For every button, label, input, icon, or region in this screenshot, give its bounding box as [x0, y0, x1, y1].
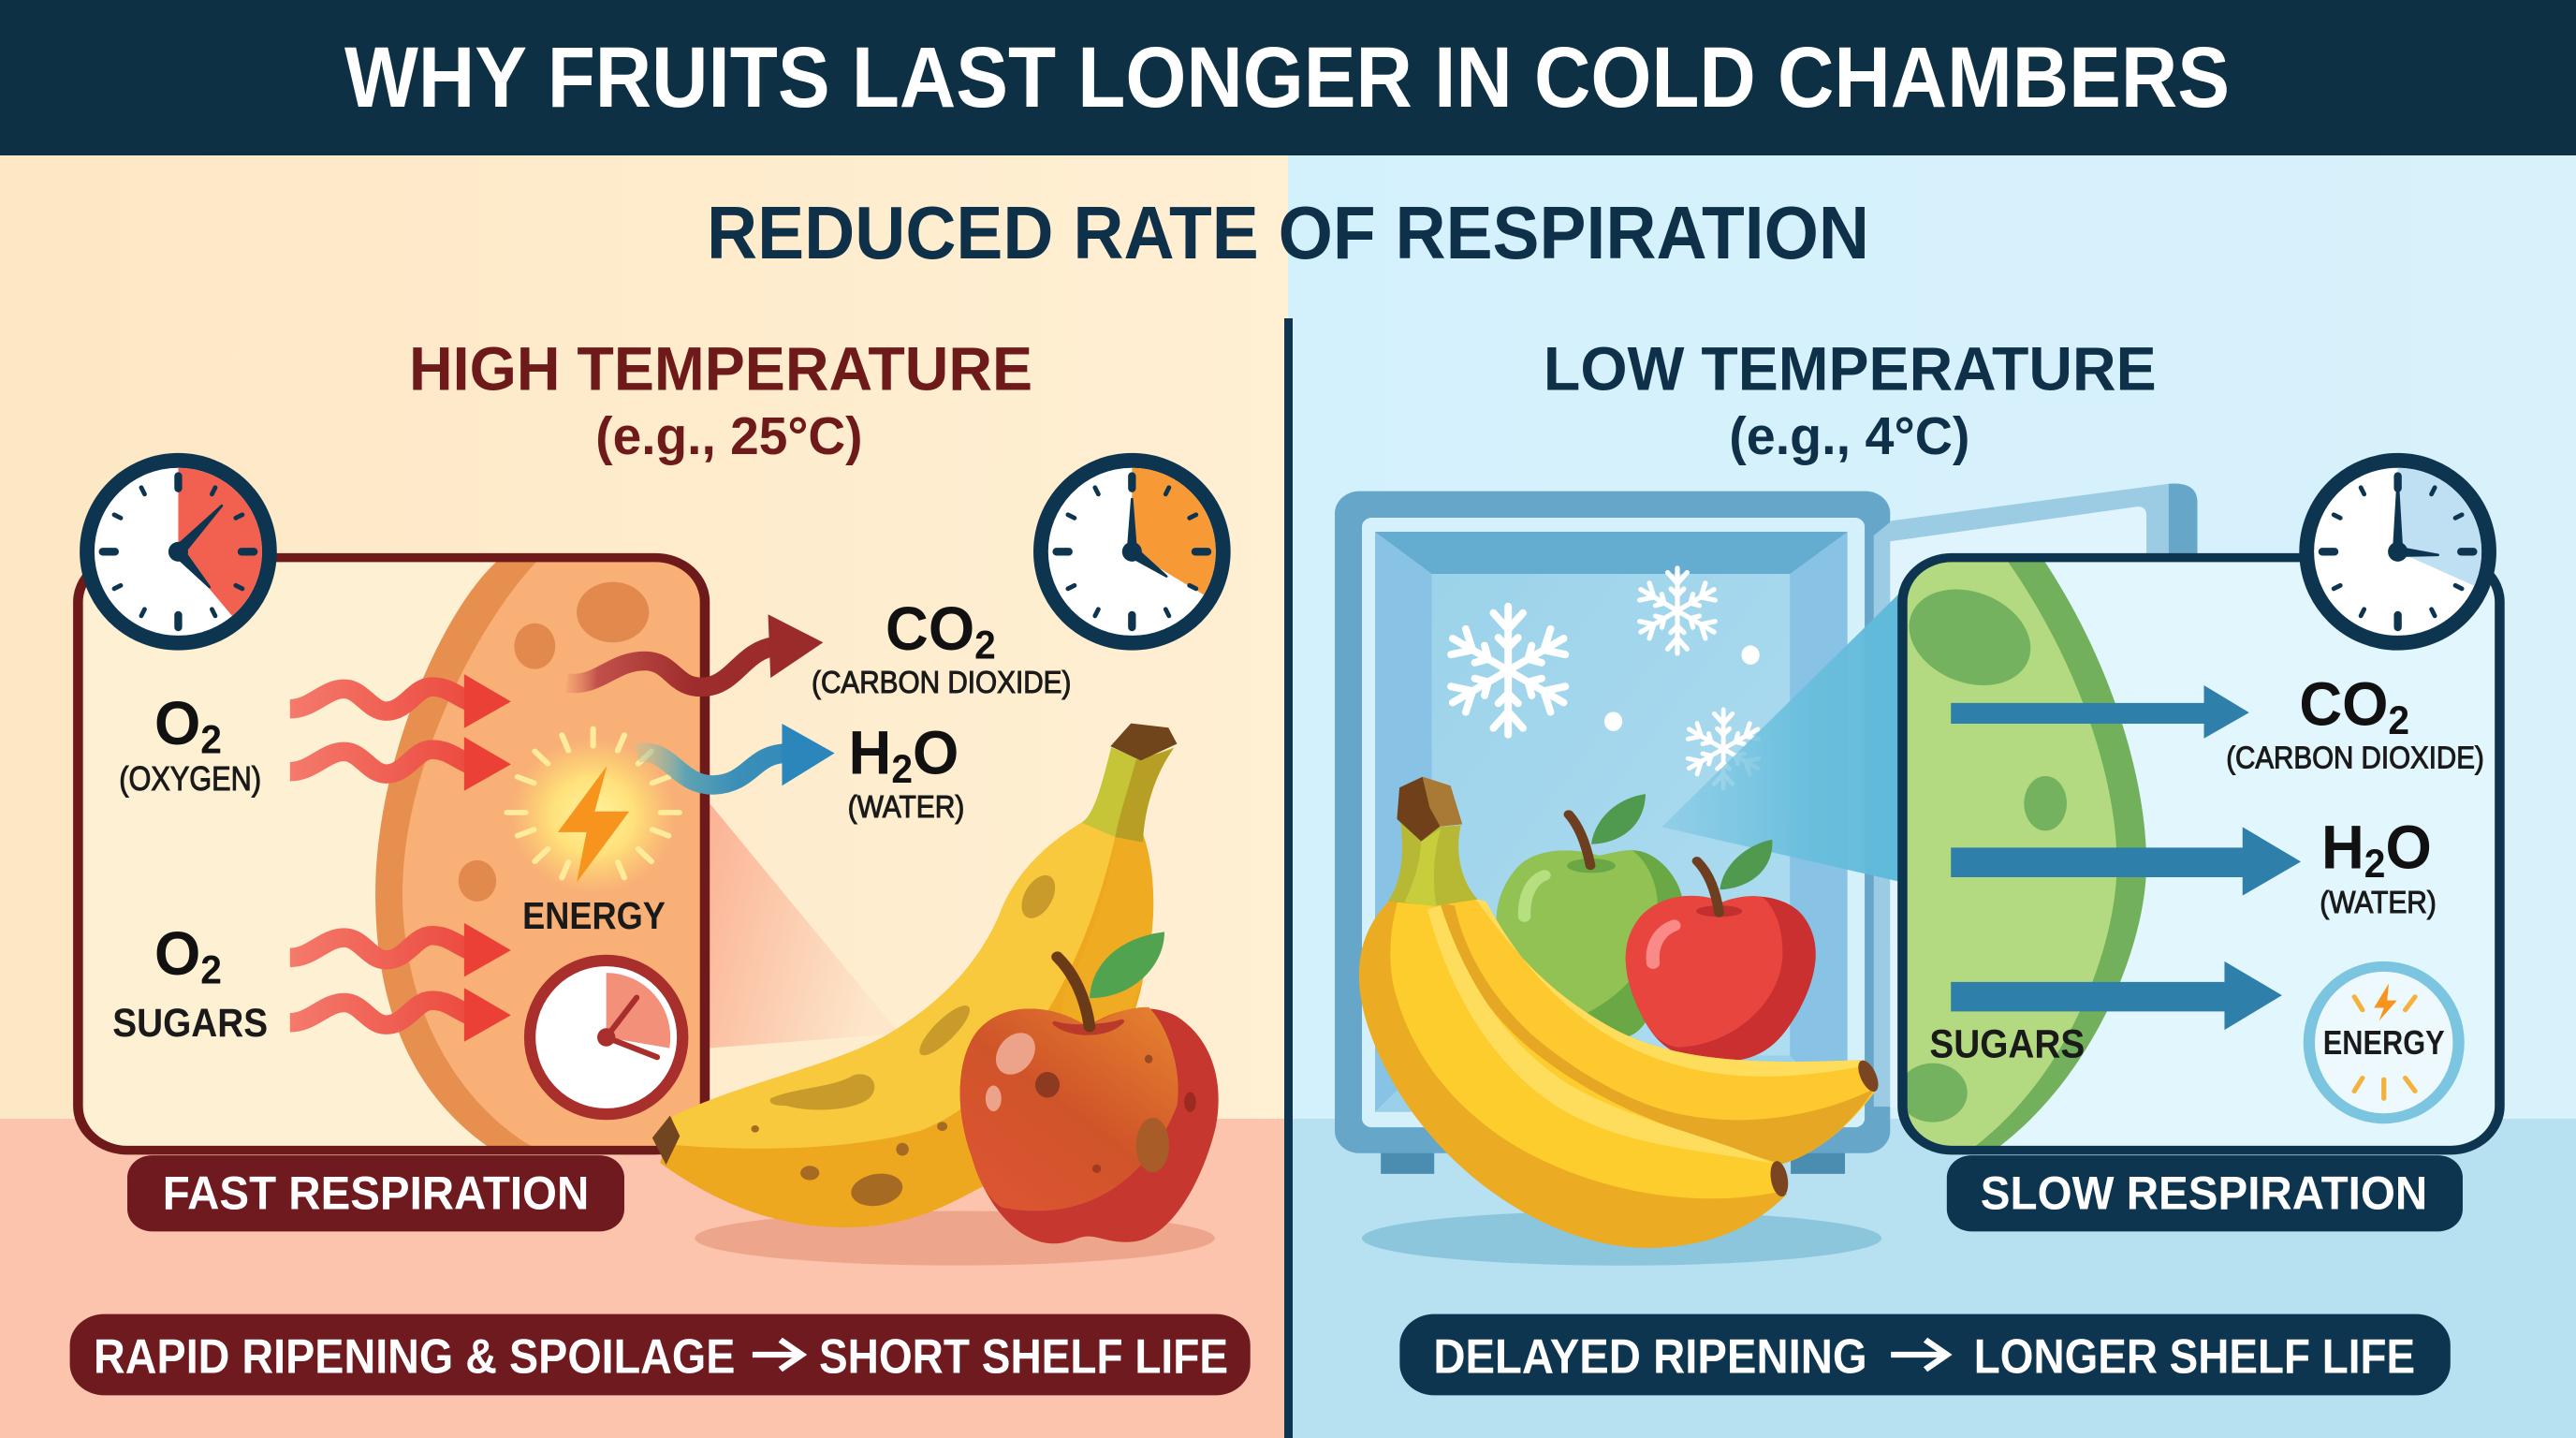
fruit cross section	[375, 558, 705, 1151]
illustration: open cold chamber	[1335, 484, 2198, 1174]
front banana	[1359, 901, 1791, 1248]
pill: longer shelf life: LONGER SHELF LIFE	[1974, 1328, 2415, 1384]
fruit cross section	[1890, 558, 2146, 1151]
background: cool floor	[1288, 1119, 2576, 1438]
ground shadow	[695, 1211, 1215, 1266]
overripe banana	[652, 724, 1177, 1227]
pill: short shelf life: RAPID RIPENING & SPOILAGE	[94, 1328, 735, 1384]
red apple	[1626, 840, 1816, 1062]
back banana	[1436, 899, 1882, 1164]
fruit spots	[1908, 590, 2067, 1123]
chamber feet	[1381, 1144, 1845, 1174]
subtitle: REDUCED RATE OF RESPIRATION	[707, 191, 1869, 274]
zoom beam to fruit	[1661, 587, 1906, 883]
label: CO2 carbon dioxide: CO	[886, 594, 974, 663]
label: H2O water	[2320, 812, 2437, 919]
label: CO2 carbon dioxide: (CARBON DIOXIDE)	[812, 666, 1071, 699]
pill: fast respiration: FAST RESPIRATION	[163, 1167, 589, 1220]
label: CO2 carbon dioxide: 2	[974, 623, 996, 668]
label: H2O water: (WATER)	[848, 790, 964, 825]
icon: clock top right	[1041, 461, 1223, 643]
label: CO2 carbon dioxide	[812, 594, 1071, 699]
background: cool right half	[1288, 150, 2576, 1123]
background: warm left half	[0, 150, 1288, 1123]
label: H2O water: O	[2385, 812, 2432, 882]
icon: small clock in fruit	[530, 961, 682, 1114]
label: CO2 carbon dioxide: (CARBON DIOXIDE)	[2226, 741, 2484, 775]
label: H2O water	[848, 717, 964, 825]
label: O2 oxygen	[119, 688, 261, 798]
fruit spots	[459, 582, 649, 902]
pill: short shelf life: SHORT SHELF LIFE	[819, 1328, 1228, 1384]
label: H2O water: H	[849, 717, 891, 787]
chamber door	[1874, 484, 2169, 1107]
heading: high temperature: HIGH TEMPERATURE	[409, 334, 1032, 404]
pill: slow respiration: SLOW RESPIRATION	[1981, 1167, 2427, 1220]
label: H2O water: 2	[891, 746, 913, 791]
icon: fast clock top left	[87, 461, 270, 643]
arrow: CO2 out	[567, 614, 823, 687]
pill: slow respiration	[1947, 1155, 2463, 1231]
cell box	[1902, 558, 2499, 1151]
energy burst	[506, 728, 680, 893]
label: CO2 carbon dioxide: 2	[2388, 697, 2409, 742]
icon: slow clock	[2306, 461, 2489, 643]
label: CO2 carbon dioxide	[2226, 668, 2484, 775]
pill: short shelf life	[70, 1314, 1251, 1395]
arrow: H2O out	[637, 724, 835, 785]
chamber body	[1335, 492, 1890, 1153]
snowflakes	[1445, 568, 1763, 788]
label: O2 sugars: 2	[200, 947, 222, 992]
label: energy: ENERGY	[522, 895, 666, 938]
icon: energy badge: ENERGY	[2323, 1024, 2445, 1063]
box outline	[1902, 558, 2499, 1151]
overripe apple	[960, 932, 1219, 1243]
heading: low temperature: LOW TEMPERATURE	[1544, 334, 2157, 404]
label: CO2 carbon dioxide: CO	[2299, 668, 2388, 739]
label: O2 sugars: SUGARS	[112, 1000, 268, 1046]
pill: fast respiration	[127, 1155, 624, 1231]
panel: high temperature	[70, 334, 1251, 1395]
label: O2 oxygen: O	[154, 688, 200, 757]
illustration: overripe banana and apple	[652, 724, 1219, 1266]
header band	[0, 0, 2576, 155]
icon: energy badge	[2309, 966, 2459, 1119]
label: O2 oxygen: 2	[200, 717, 222, 762]
label: O2 sugars	[112, 918, 268, 1046]
pill: longer shelf life: DELAYED RIPENING	[1433, 1328, 1867, 1384]
title: WHY FRUITS LAST LONGER IN COLD CHAMBERS	[344, 30, 2230, 125]
subheading: 25C: (e.g., 25°C)	[595, 406, 862, 466]
label: O2 sugars: O	[154, 918, 200, 988]
arrow: H2O out	[1951, 827, 2301, 896]
label: O2 oxygen: (OXYGEN)	[119, 760, 261, 798]
pill: longer shelf life	[1399, 1314, 2451, 1395]
center divider	[1284, 318, 1293, 1438]
box outline	[78, 558, 705, 1151]
label: H2O water: (WATER)	[2320, 885, 2437, 919]
ground shadow	[1362, 1211, 1881, 1266]
subheading: 4C: (e.g., 4°C)	[1729, 406, 1969, 466]
arrow: energy out	[1951, 961, 2282, 1030]
cell box	[78, 558, 705, 1151]
background: warm floor	[0, 1119, 1288, 1438]
arrow: CO2 out	[1951, 685, 2249, 739]
label: H2O water: 2	[2364, 841, 2385, 886]
zoom beam to fruit	[705, 798, 900, 1049]
arrows: O2 and sugars in	[290, 674, 511, 1042]
label: H2O water: H	[2321, 812, 2364, 882]
banana stems	[1388, 777, 1478, 906]
green apple	[1497, 794, 1683, 1038]
illustration: fresh bananas and apples	[1359, 777, 1882, 1266]
label: sugars: SUGARS	[1929, 1021, 2085, 1066]
panel: low temperature	[1335, 334, 2499, 1395]
label: H2O water: O	[913, 717, 959, 787]
